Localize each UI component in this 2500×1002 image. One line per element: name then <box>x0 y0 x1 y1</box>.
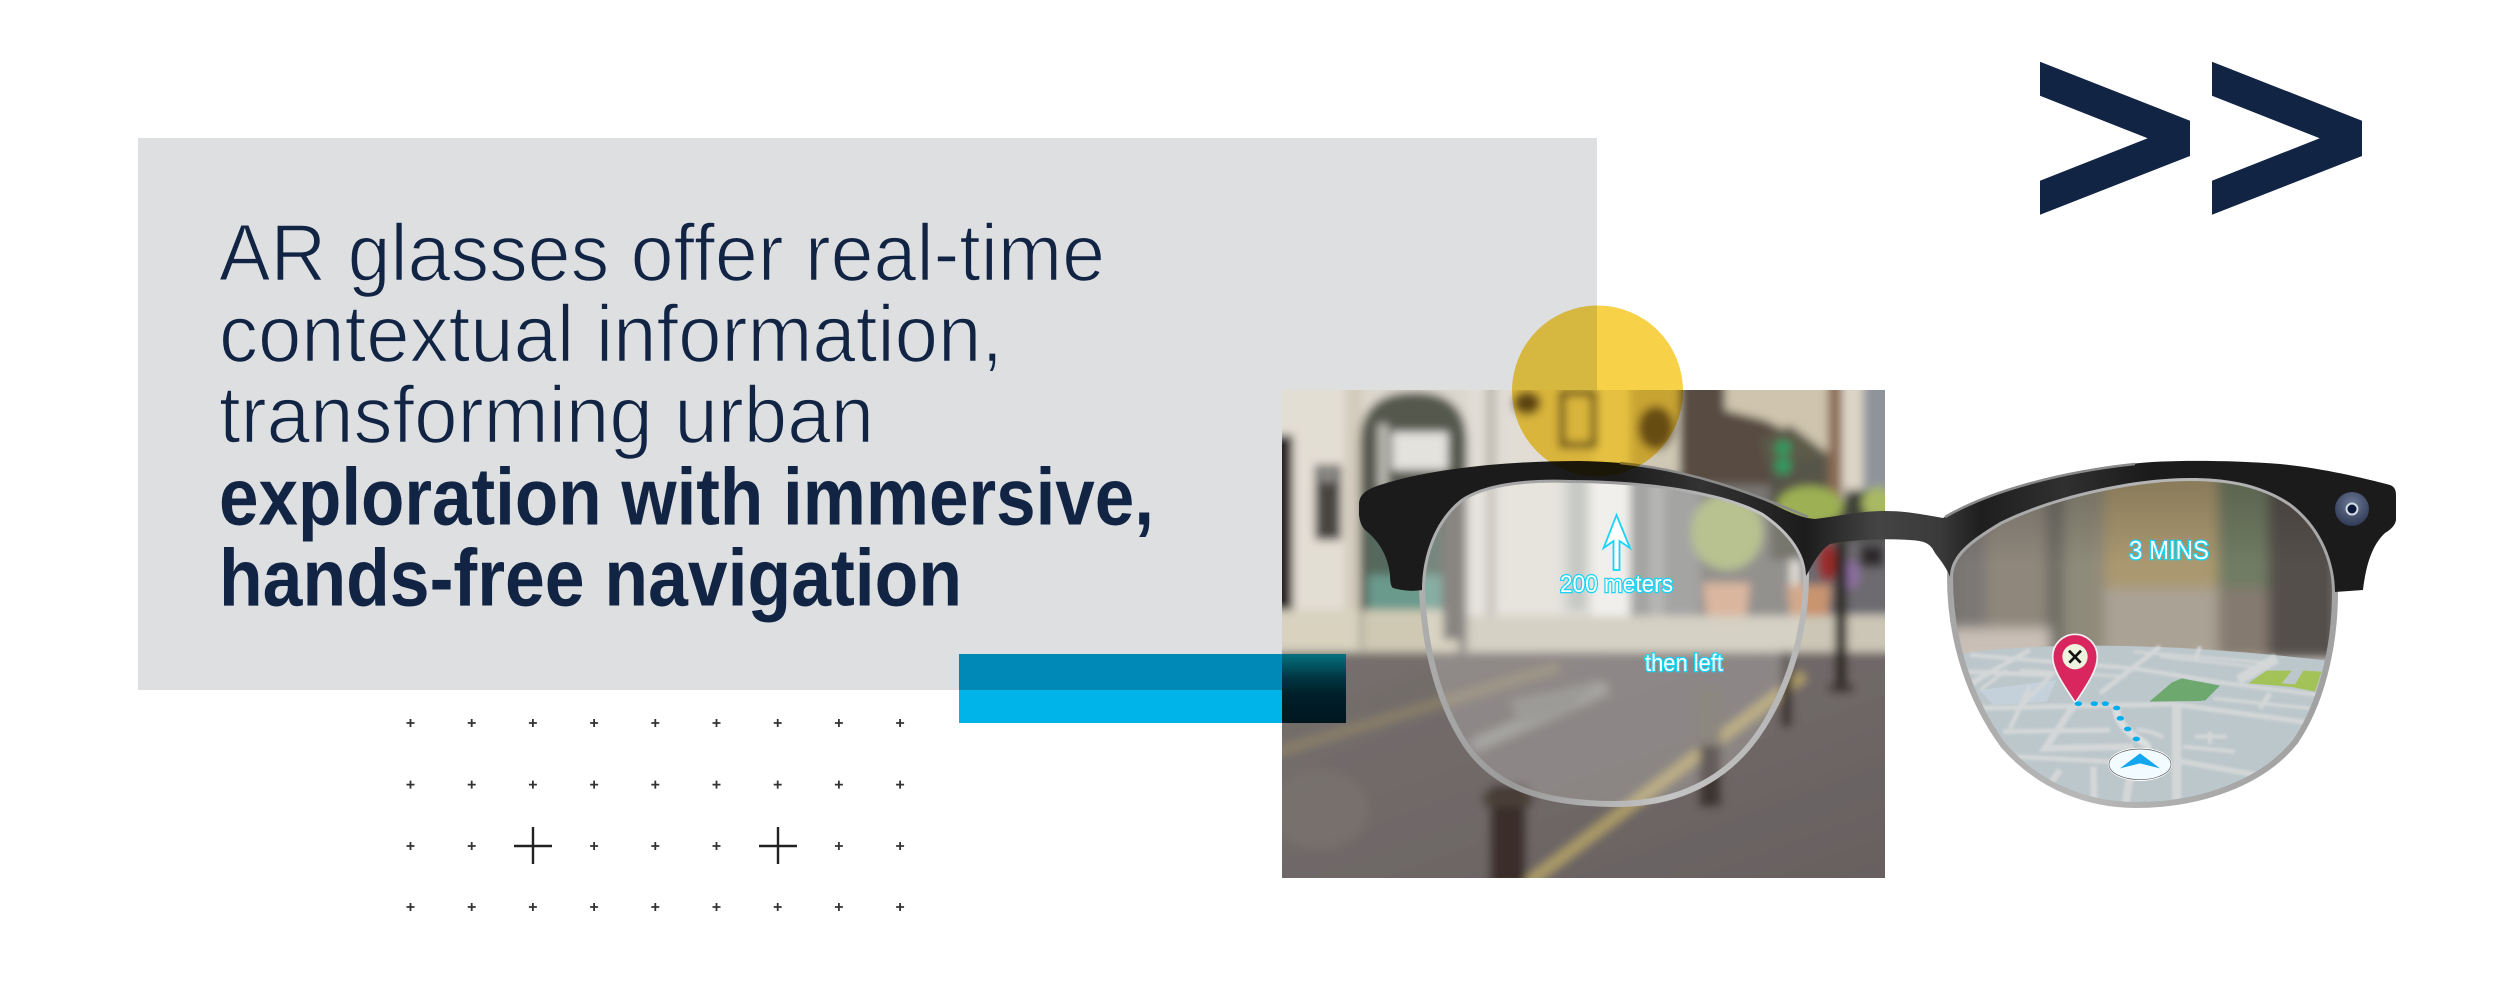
heading: AR glasses statement: transforming urban <box>219 370 874 460</box>
label: then left: then left <box>1645 650 1723 677</box>
label: 200 meters: 200 meters <box>1560 571 1673 598</box>
map: streets and parks <box>1963 634 2325 802</box>
route: blue dots <box>2075 701 2140 741</box>
label: 3 MINS: 3 MINS <box>2129 535 2209 565</box>
icon: navigation arrow <box>2108 748 2172 781</box>
glasses frame: top browline and bridge <box>1359 461 2396 592</box>
heading: AR glasses statement: exploration with immersive, <box>219 452 1154 542</box>
panel: grey headline panel <box>138 138 1597 690</box>
photo: blurred city street <box>1282 390 1885 878</box>
icon: AR up arrow <box>1604 515 1630 570</box>
accent: yellow circle <box>1512 306 1683 476</box>
heading: AR glasses statement: hands-free navigation <box>219 534 962 624</box>
icon: glasses camera <box>2335 492 2369 526</box>
heading: AR glasses statement <box>219 208 1154 624</box>
left lens: whitened glass <box>1422 480 1806 804</box>
lens rims: silver <box>1422 478 2335 805</box>
right lens: street view with map <box>1953 481 2332 802</box>
accent bar: cyan block overlapping panel and photo <box>959 654 1346 723</box>
heading: AR glasses statement: AR glasses offer real-time <box>219 208 1105 298</box>
right lens: blurred street background <box>1953 481 2332 660</box>
heading: AR glasses statement: contextual information, <box>219 290 1003 380</box>
map marker: restaurant pin <box>2053 634 2097 703</box>
icon: double chevron arrows <box>2040 62 2362 215</box>
pattern: plus-sign grid <box>406 719 904 911</box>
